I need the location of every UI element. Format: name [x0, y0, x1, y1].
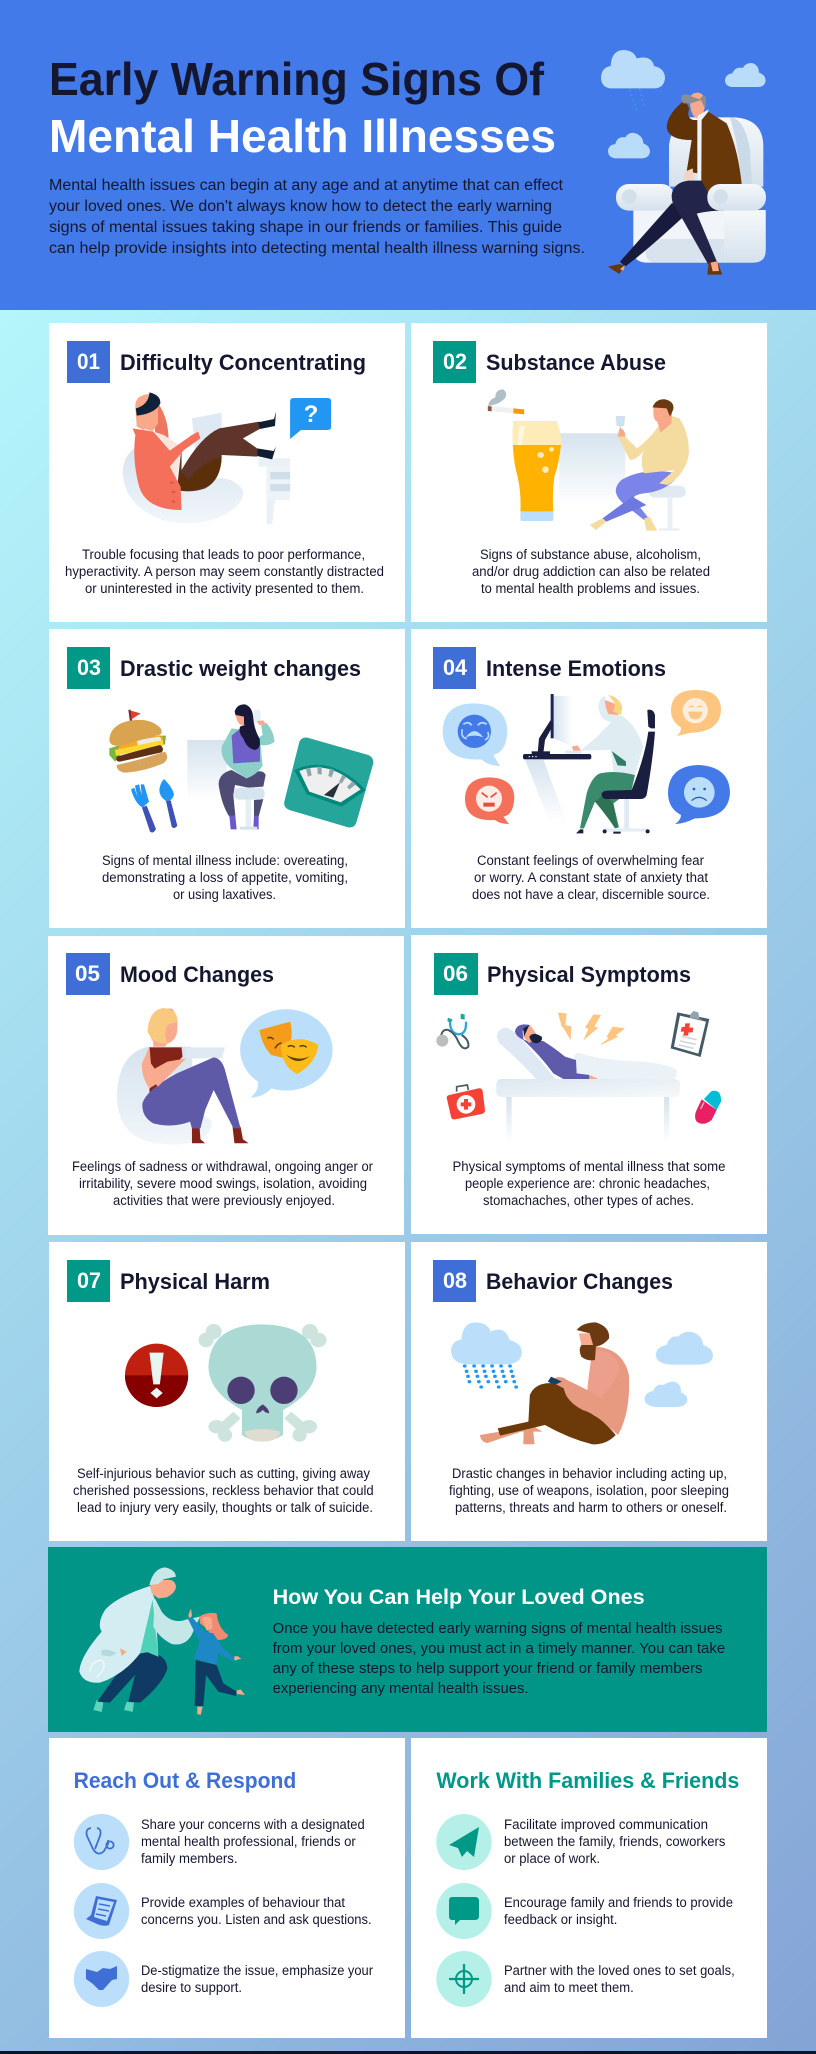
- panel: 03 Drastic weight changes: [49, 629, 405, 928]
- description: lead to injury very easily, thoughts or talk of suicide.: [77, 1500, 373, 1515]
- panel: 07 Physical Harm: [49, 1242, 405, 1541]
- share text: [141, 1817, 365, 1866]
- heading: Mood Changes: [120, 962, 274, 987]
- icon: handshake: [74, 1951, 129, 2007]
- description: irritability, severe mood swings, isolation, avoiding: [79, 1176, 367, 1191]
- goals text: Partner with the loved ones to set goals,: [504, 1963, 735, 1978]
- intro text: Mental health issues can begin at any age and at anytime that can effect: [49, 177, 564, 194]
- share text: family members.: [141, 1851, 238, 1866]
- description: or uninterested in the activity presented to them.: [85, 581, 364, 596]
- description: patterns, threats and harm to others or oneself.: [455, 1500, 727, 1515]
- illustration: warning sign and skull: [125, 1324, 326, 1442]
- heading: Difficulty Concentrating: [120, 350, 366, 375]
- description: [102, 853, 348, 902]
- heading: Physical Harm: [120, 1269, 270, 1294]
- description: [72, 1159, 373, 1208]
- title: Mental Health Illnesses: [49, 110, 556, 162]
- feedback text: Encourage family and friends to provide: [504, 1895, 733, 1910]
- destigmatize text: desire to support.: [141, 1980, 242, 1995]
- number badge 08: [433, 1260, 476, 1302]
- description: Signs of mental illness include: overeating,: [102, 853, 348, 868]
- footer bar: [0, 2051, 816, 2054]
- illustration: person at desk with emotion bubbles: [443, 690, 730, 834]
- icon: stethoscope: [74, 1814, 129, 1870]
- description: or using laxatives.: [173, 887, 276, 902]
- description: activities that were previously enjoyed.: [113, 1193, 335, 1208]
- heading: Work With Families & Friends: [436, 1768, 739, 1793]
- number badge 06: [434, 953, 478, 995]
- number badge 05: [66, 953, 110, 995]
- number badge 05: 05: [75, 961, 100, 986]
- number badge 02: [433, 341, 476, 383]
- band text: from your loved ones, you must act in a timely manner. You can take: [273, 1640, 725, 1657]
- icon: paper plane: [436, 1814, 492, 1870]
- illustration: person with feet on desk: [123, 392, 331, 524]
- number badge 03: [67, 647, 110, 689]
- communication text: or place of work.: [504, 1851, 600, 1866]
- panel: 01 Difficulty Concentrating: [49, 323, 405, 622]
- description: Physical symptoms of mental illness that some: [452, 1159, 726, 1174]
- description: [472, 853, 710, 902]
- feedback text: [504, 1895, 733, 1927]
- description: cherished possessions, reckless behavior that could: [73, 1483, 374, 1498]
- panel: reach out and respond: [49, 1738, 405, 2038]
- intro text: your loved ones. We don't always know how to detect the early warning: [49, 198, 552, 215]
- description: demonstrating a loss of appetite, vomiting,: [102, 870, 348, 885]
- panel: 02 Substance Abuse: [411, 323, 767, 622]
- heading: Intense Emotions: [486, 656, 666, 681]
- number badge 04: 04: [443, 655, 468, 680]
- illustration: beer, cigarette and man on stool: [488, 389, 689, 531]
- examples text: [141, 1895, 372, 1927]
- description: [449, 1466, 729, 1515]
- destigmatize text: De-stigmatize the issue, emphasize your: [141, 1963, 373, 1978]
- intro text: [49, 177, 585, 257]
- communication text: Facilitate improved communication: [504, 1817, 708, 1832]
- description: Drastic changes in behavior including acting up,: [452, 1466, 727, 1481]
- panel: work with families and friends: [411, 1738, 767, 2038]
- number badge 07: 07: [77, 1268, 101, 1293]
- panel: 08 Behavior Changes: [411, 1242, 767, 1541]
- number badge 02: 02: [443, 349, 467, 374]
- question mark: ?: [304, 401, 318, 428]
- heading: Behavior Changes: [486, 1269, 673, 1294]
- heading: Drastic weight changes: [120, 656, 361, 681]
- panel: 05 Mood Changes: [48, 936, 404, 1235]
- panel: 04 Intense Emotions: [411, 629, 767, 928]
- description: stomachaches, other types of aches.: [483, 1193, 694, 1208]
- icon: document: [74, 1883, 129, 1939]
- feedback text: feedback or insight.: [504, 1912, 617, 1927]
- description: does not have a clear, discernible source.: [472, 887, 710, 902]
- band text: Once you have detected early warning signs of mental health issues: [273, 1620, 723, 1637]
- description: fighting, use of weapons, isolation, poor sleeping: [449, 1483, 729, 1498]
- illustration: man in armchair with clouds: [601, 50, 766, 275]
- description: or worry. A constant state of anxiety that: [474, 870, 708, 885]
- panel: 06 Physical Symptoms: [411, 935, 767, 1234]
- number badge 01: 01: [77, 349, 100, 374]
- description: hyperactivity. A person may seem constantly distracted: [65, 564, 384, 579]
- description: people experience are: chronic headaches,: [465, 1176, 710, 1191]
- description: Signs of substance abuse, alcoholism,: [480, 547, 701, 562]
- number badge 07: [67, 1260, 110, 1302]
- communication text: between the family, friends, coworkers: [504, 1834, 726, 1849]
- illustration: woman on beanbag with masks bubble: [117, 1008, 333, 1145]
- heading: Physical Symptoms: [487, 962, 691, 987]
- number badge 04: [433, 647, 476, 689]
- band text: any of these steps to help support your friend or family members: [273, 1660, 703, 1677]
- band text: [273, 1620, 725, 1697]
- number badge 08: 08: [443, 1268, 467, 1293]
- illustration: man sitting with phone, clouds and rain: [451, 1322, 713, 1444]
- description: [65, 547, 384, 596]
- intro text: signs of mental issues taking shape in our friends or families. This guide: [49, 219, 562, 236]
- communication text: [504, 1817, 726, 1866]
- illustration: burger, cutlery, woman and scale: [109, 704, 373, 833]
- examples text: concerns you. Listen and ask questions.: [141, 1912, 372, 1927]
- examples text: Provide examples of behaviour that: [141, 1895, 345, 1910]
- description: and/or drug addiction can also be related: [472, 564, 710, 579]
- goals text: [504, 1963, 735, 1995]
- number badge 01: [67, 341, 110, 383]
- destigmatize text: [141, 1963, 373, 1995]
- panel: how you can help: [48, 1547, 767, 1732]
- illustration: patient on bed with medical icons: [436, 1011, 721, 1144]
- description: Constant feelings of overwhelming fear: [477, 853, 704, 868]
- description: Feelings of sadness or withdrawal, ongoing anger or: [72, 1159, 373, 1174]
- description: Self-injurious behavior such as cutting, giving away: [77, 1466, 370, 1481]
- description: [73, 1466, 374, 1515]
- share text: mental health professional, friends or: [141, 1834, 356, 1849]
- band heading: How You Can Help Your Loved Ones: [273, 1585, 645, 1609]
- share text: Share your concerns with a designated: [141, 1817, 365, 1832]
- header band: [0, 0, 816, 310]
- icon: target: [436, 1951, 492, 2007]
- intro text: can help provide insights into detecting mental health illness warning signs.: [49, 240, 585, 257]
- heading: Reach Out & Respond: [74, 1768, 296, 1793]
- description: [452, 1159, 726, 1208]
- number badge 03: 03: [77, 655, 101, 680]
- heading: Substance Abuse: [486, 350, 666, 375]
- illustration: doctor and child: [79, 1567, 245, 1715]
- title: [49, 53, 556, 162]
- title: Early Warning Signs Of: [49, 53, 545, 105]
- goals text: and aim to meet them.: [504, 1980, 634, 1995]
- description: Trouble focusing that leads to poor performance,: [82, 547, 365, 562]
- icon: speech bubble: [436, 1883, 492, 1939]
- description: [472, 547, 710, 596]
- band text: experiencing any mental health issues.: [273, 1680, 529, 1697]
- description: to mental health problems and issues.: [481, 581, 700, 596]
- number badge 06: 06: [443, 961, 468, 986]
